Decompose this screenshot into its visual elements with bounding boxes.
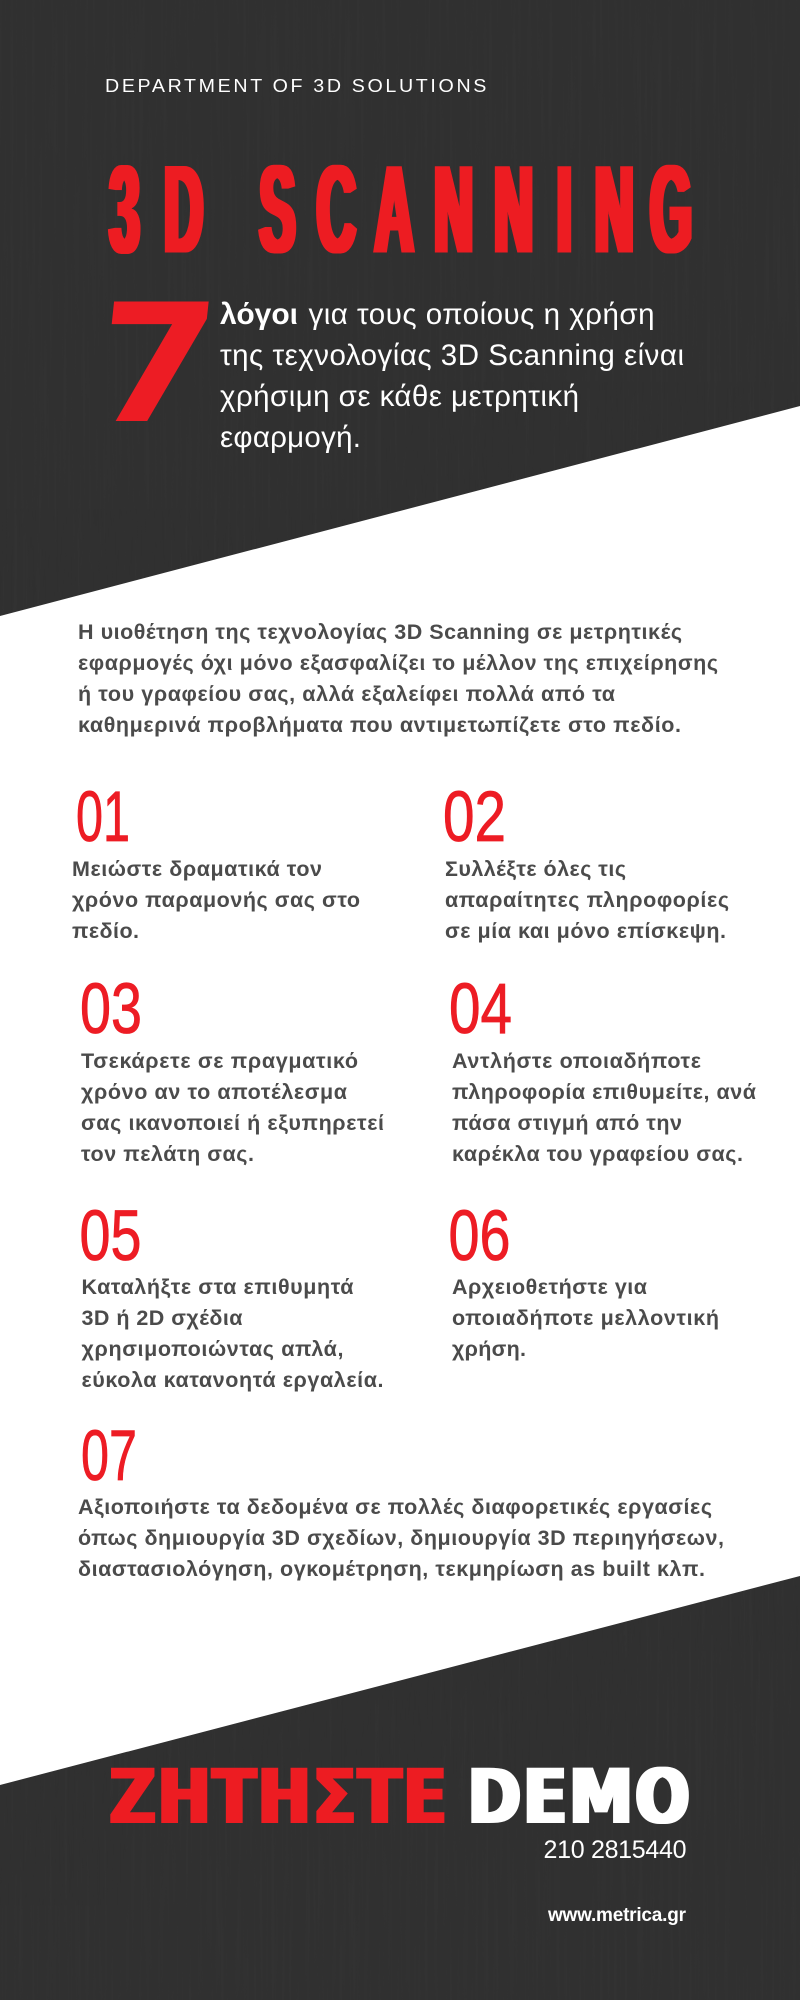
text 02 xyxy=(445,857,729,943)
intro headline text xyxy=(220,298,684,454)
reason 07 xyxy=(78,1417,724,1581)
intro headline text: για τους οποίους η χρήση xyxy=(308,298,654,331)
department label: DEPARTMENT OF 3D SOLUTIONS xyxy=(105,75,489,96)
panel: dark header background xyxy=(0,0,800,620)
text 06: οποιαδήποτε μελλοντική xyxy=(452,1306,719,1330)
text 01: χρόνο παραμονής σας στο xyxy=(72,888,360,912)
text 05 xyxy=(82,1275,384,1392)
reason 05 xyxy=(80,1197,384,1392)
title: 3D SCANNING xyxy=(110,141,692,280)
intro headline text: της τεχνολογίας 3D Scanning είναι xyxy=(220,339,684,372)
reason 01 xyxy=(72,778,360,943)
phone number: 210 2815440 xyxy=(544,1836,686,1864)
text 04: καρέκλα του γραφείου σας. xyxy=(452,1142,743,1166)
number 05: 05 xyxy=(80,1197,142,1276)
text 07 xyxy=(78,1495,724,1581)
text 06: Αρχειοθετήστε για xyxy=(452,1275,647,1299)
text 06 xyxy=(452,1275,719,1361)
text 03: τον πελάτη σας. xyxy=(81,1142,254,1166)
text 07: όπως δημιουργία 3D σχεδίων, δημιουργία 3D περιηγήσεων, xyxy=(78,1526,724,1550)
intro paragraph: εφαρμογές όχι μόνο εξασφαλίζει το μέλλον της επιχείρησης xyxy=(78,651,718,675)
text 02: απαραίτητες πληροφορίες xyxy=(445,888,729,912)
intro paragraph: καθημερινά προβλήματα που αντιμετωπίζετε στο πεδίο. xyxy=(78,713,681,737)
intro headline text: χρήσιμη σε κάθε μετρητική xyxy=(220,380,579,413)
text 04 xyxy=(452,1049,756,1166)
number 04: 04 xyxy=(449,970,512,1049)
call to action: ΖΗΤΗΣΤΕ xyxy=(110,1752,449,1841)
text 04: πάσα στιγμή από την xyxy=(452,1111,682,1135)
text 05: χρησιμοποιώντας απλά, xyxy=(82,1337,344,1361)
text 01: πεδίο. xyxy=(72,919,139,943)
number 01: 01 xyxy=(76,778,130,857)
text 06: χρήση. xyxy=(452,1337,526,1361)
text 02: Συλλέξτε όλες τις xyxy=(445,857,626,881)
text 03: σας ικανοποιεί ή εξυπηρετεί xyxy=(81,1111,384,1135)
intro paragraph xyxy=(78,620,718,737)
reason 03 xyxy=(80,970,384,1166)
text 03: Τσεκάρετε σε πραγματικό xyxy=(81,1049,358,1073)
intro headline text: λόγοι xyxy=(220,298,298,331)
text 01 xyxy=(72,857,360,943)
text 02: σε μία και μόνο επίσκεψη. xyxy=(445,919,726,943)
text 05: 3D ή 2D σχέδια xyxy=(82,1306,242,1330)
website: www.metrica.gr xyxy=(547,1905,687,1926)
reason 04 xyxy=(449,970,756,1166)
text 07: διαστασιολόγηση, ογκομέτρηση, τεκμηρίωση as built κλπ. xyxy=(78,1557,705,1581)
text 03: χρόνο αν το αποτέλεσμα xyxy=(81,1080,347,1104)
text 01: Μειώστε δραματικά τον xyxy=(72,857,322,881)
text 04: Αντλήστε οποιαδήποτε xyxy=(452,1049,701,1073)
text 05: εύκολα κατανοητά εργαλεία. xyxy=(82,1368,384,1392)
number 07: 07 xyxy=(81,1417,137,1496)
reason 06 xyxy=(448,1197,719,1361)
number 02: 02 xyxy=(443,778,506,857)
number 06: 06 xyxy=(448,1197,510,1276)
intro paragraph: Η υιοθέτηση της τεχνολογίας 3D Scanning σε μετρητικές xyxy=(78,620,682,644)
call to action: DEMO xyxy=(468,1752,692,1841)
intro headline text: εφαρμογή. xyxy=(220,421,361,454)
text 05: Καταλήξτε στα επιθυμητά xyxy=(82,1275,354,1299)
text 03 xyxy=(81,1049,384,1166)
text 04: πληροφορία επιθυμείτε, ανά xyxy=(452,1080,756,1104)
text 07: Αξιοποιήστε τα δεδομένα σε πολλές διαφορετικές εργασίες xyxy=(78,1495,712,1519)
panel: dark footer background xyxy=(0,1570,800,2000)
reason 02 xyxy=(443,778,729,943)
number 03: 03 xyxy=(80,970,142,1049)
big number seven: 7 xyxy=(86,269,226,460)
intro paragraph: ή του γραφείου σας, αλλά εξαλείφει πολλά από τα xyxy=(78,682,615,706)
